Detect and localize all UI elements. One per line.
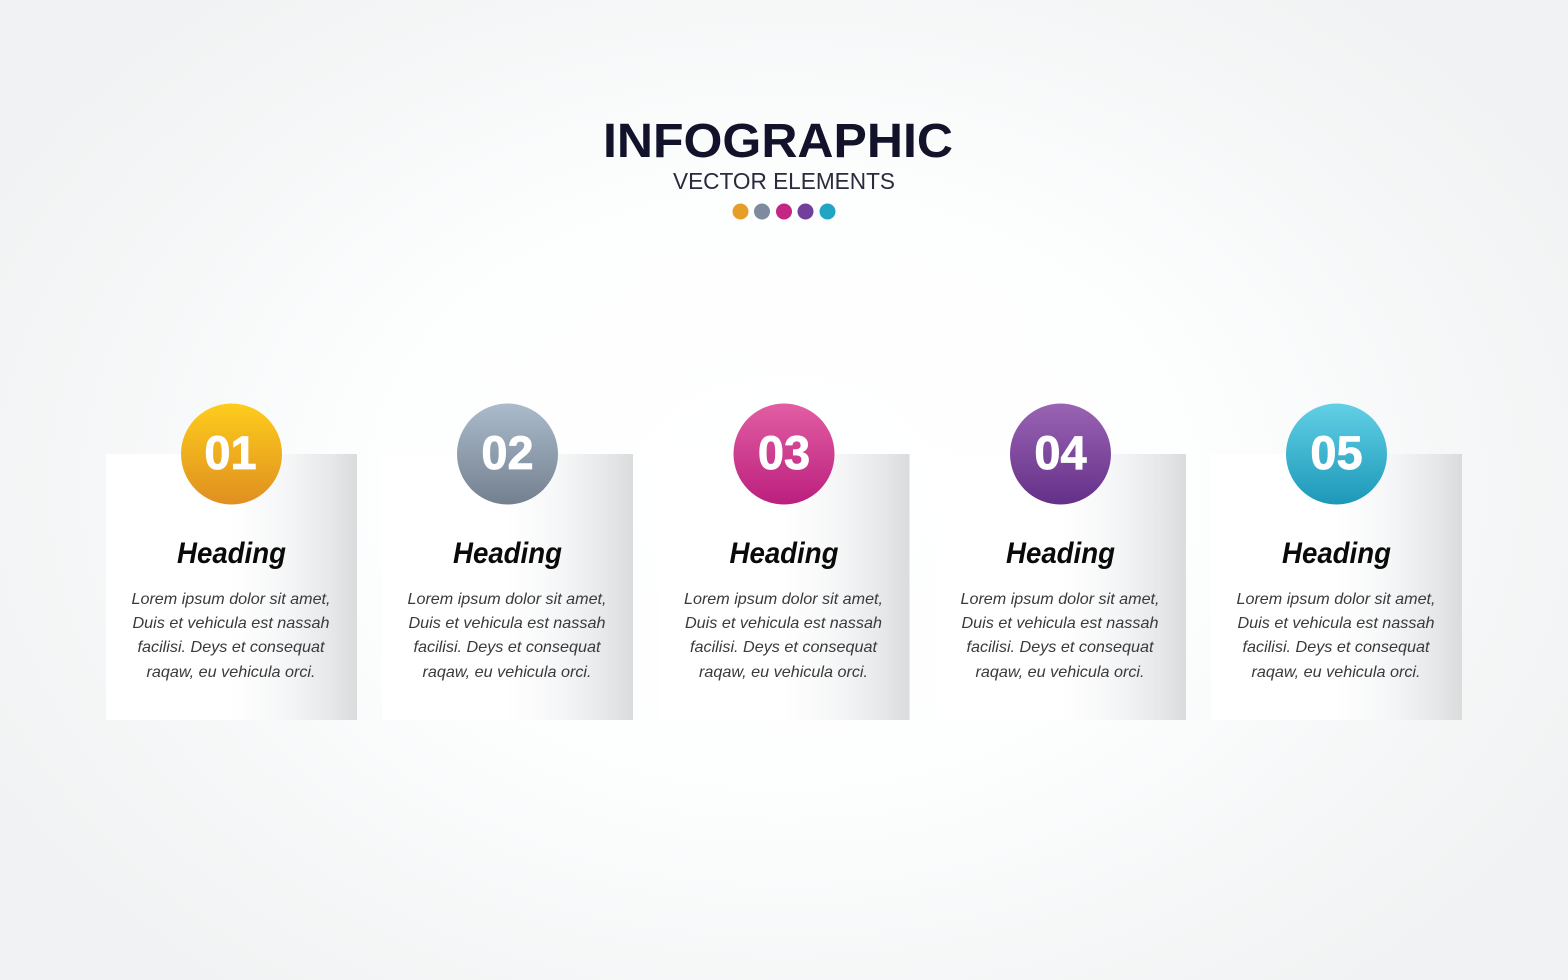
panel: step 04 xyxy=(935,404,1186,720)
panel: step 03 xyxy=(658,404,910,720)
number badge 03 xyxy=(734,404,834,504)
heading 05: Heading xyxy=(1282,537,1391,570)
number badge 01 xyxy=(181,404,282,504)
card 01 xyxy=(106,454,357,720)
body text 02: raqaw, eu vehicula orci. xyxy=(422,664,592,681)
body text 04: raqaw, eu vehicula orci. xyxy=(976,664,1144,681)
body text 03: raqaw, eu vehicula orci. xyxy=(699,664,868,681)
body text 05: Duis et vehicula est nassah xyxy=(1238,615,1435,632)
panel: step 01 xyxy=(106,404,357,720)
panel: step 02 xyxy=(382,404,633,720)
title block xyxy=(603,115,953,220)
body text 03: facilisi. Deys et consequat xyxy=(690,639,878,656)
number badge 03: 03 xyxy=(758,426,810,479)
card 03 xyxy=(658,454,910,720)
number badge 04: 04 xyxy=(1034,426,1087,479)
card 05 xyxy=(1211,454,1462,720)
body text 02 xyxy=(408,591,606,681)
body text 01: raqaw, eu vehicula orci. xyxy=(146,664,316,681)
panel: step 05 xyxy=(1211,404,1462,720)
body text 05 xyxy=(1236,591,1436,681)
body text 01: Lorem ipsum dolor sit amet, xyxy=(132,591,330,608)
body text 03: Lorem ipsum dolor sit amet, xyxy=(684,591,883,608)
body text 03 xyxy=(684,591,883,681)
body text 02: Duis et vehicula est nassah xyxy=(408,615,606,632)
body text 01 xyxy=(132,591,330,681)
heading 01: Heading xyxy=(177,537,286,570)
number badge 05 xyxy=(1286,404,1387,504)
body text 04: facilisi. Deys et consequat xyxy=(966,639,1154,656)
colour dots xyxy=(732,204,836,220)
number badge 01: 01 xyxy=(204,426,257,479)
title: INFOGRAPHIC xyxy=(603,115,953,168)
number badge 02 xyxy=(457,404,558,504)
number badge 04 xyxy=(1010,404,1111,504)
body text 02: Lorem ipsum dolor sit amet, xyxy=(408,591,606,608)
body text 01: Duis et vehicula est nassah xyxy=(132,615,330,632)
card 04 xyxy=(935,454,1186,720)
subtitle: VECTOR ELEMENTS xyxy=(673,168,895,194)
body text 03: Duis et vehicula est nassah xyxy=(685,615,882,632)
heading 03: Heading xyxy=(730,537,838,570)
body text 02: facilisi. Deys et consequat xyxy=(414,639,601,656)
body text 01: facilisi. Deys et consequat xyxy=(138,639,325,656)
body text 04: Lorem ipsum dolor sit amet, xyxy=(960,591,1160,608)
card 02 xyxy=(382,454,633,720)
body text 05: raqaw, eu vehicula orci. xyxy=(1252,664,1420,681)
number badge 05: 05 xyxy=(1310,426,1363,479)
body text 04: Duis et vehicula est nassah xyxy=(962,615,1159,632)
body text 04 xyxy=(960,591,1160,681)
heading 02: Heading xyxy=(453,537,562,570)
body text 05: facilisi. Deys et consequat xyxy=(1242,639,1430,656)
number badge 02: 02 xyxy=(481,426,534,479)
body text 05: Lorem ipsum dolor sit amet, xyxy=(1236,591,1436,608)
heading 04: Heading xyxy=(1006,537,1115,570)
